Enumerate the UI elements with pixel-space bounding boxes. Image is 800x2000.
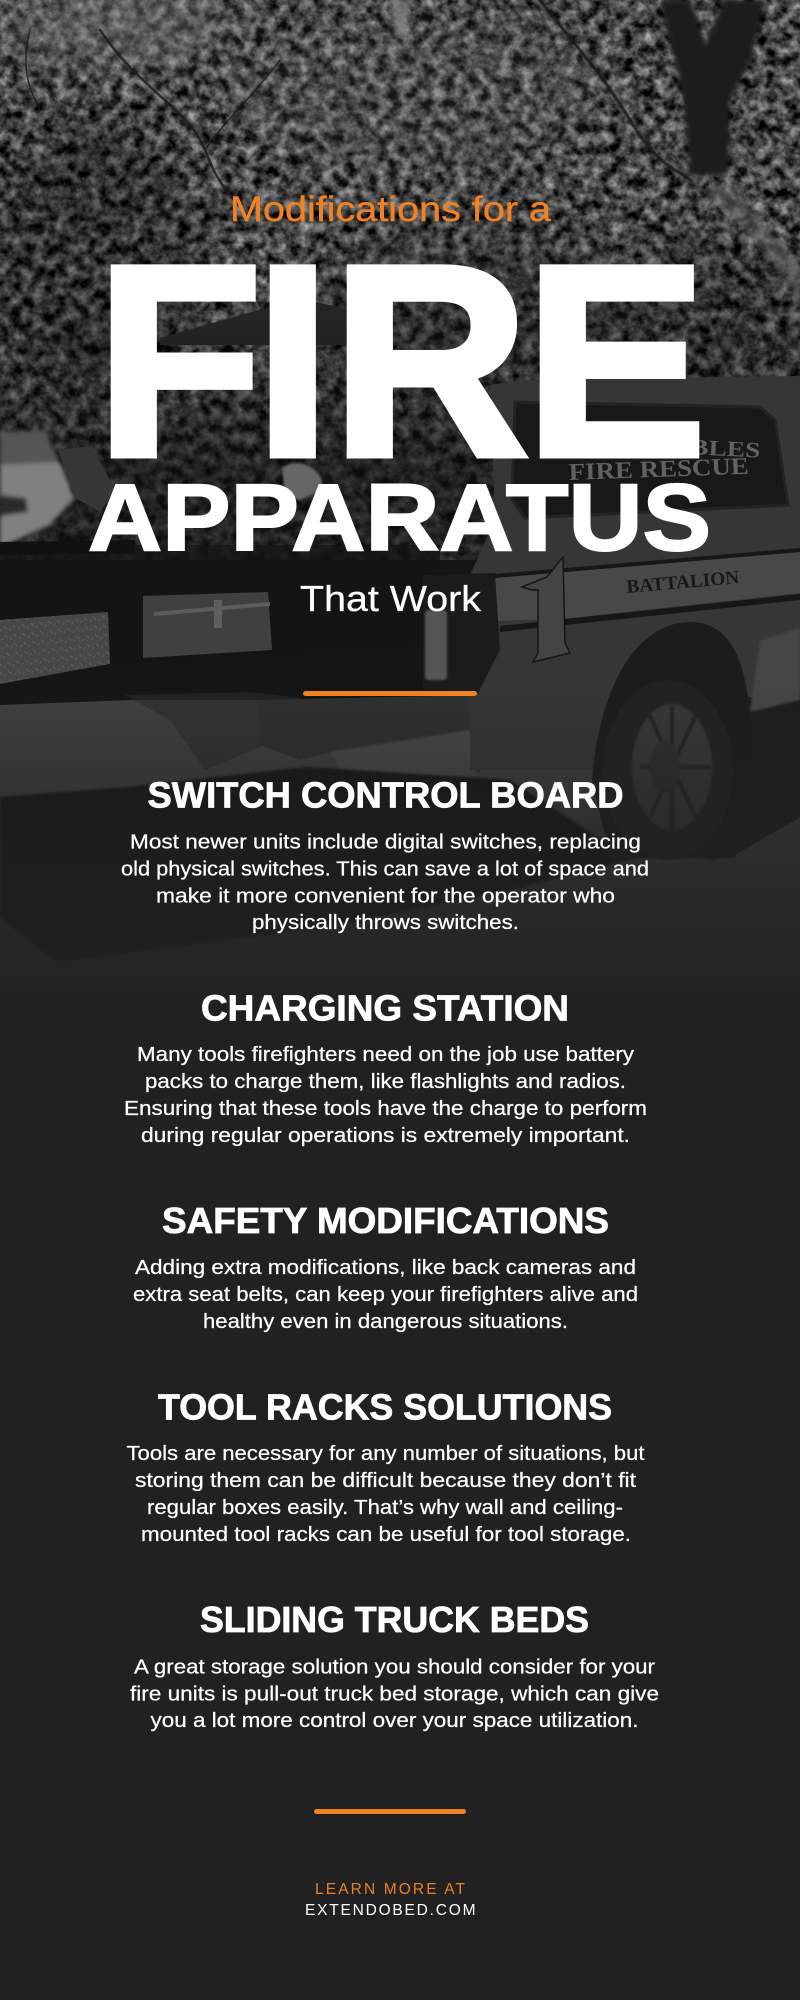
wheel rim — [632, 704, 712, 830]
body text: regular boxes easily. That’s why wall and ceiling- — [147, 1496, 623, 1519]
diamond plate box — [0, 612, 110, 684]
body text — [133, 1256, 638, 1333]
orange divider top — [303, 691, 477, 696]
learn more label: LEARN MORE AT — [315, 1881, 466, 1898]
headline: APPARATUS: APPARATUS — [88, 465, 711, 571]
title group — [88, 190, 711, 619]
rear window — [512, 402, 788, 518]
section: sliding truck beds — [130, 1599, 659, 1732]
section: tool racks solutions — [126, 1386, 645, 1546]
headline: FIRE: FIRE — [96, 209, 706, 513]
body text: storing them can be difficult because they don’t fit — [135, 1469, 636, 1492]
pale branch right — [705, 182, 800, 300]
fade to dark — [0, 690, 800, 1010]
body text: fire units is pull-out truck bed storage, which can give — [130, 1682, 659, 1706]
body text: A great storage solution you should consider for your — [134, 1656, 655, 1678]
body text: mounted tool racks can be useful for tool storage. — [141, 1523, 631, 1546]
cloth pile — [0, 430, 74, 545]
dim lower scene behind truck bed — [0, 290, 800, 690]
truck stripe — [470, 552, 800, 622]
body text: make it more convenient for the operator who — [156, 884, 615, 908]
heading: TOOL RACKS SOLUTIONS — [158, 1386, 612, 1428]
bed rail — [0, 540, 135, 555]
body text: you a lot more control over your space utilization. — [150, 1709, 638, 1732]
large trunk top right — [660, 0, 765, 175]
heading: SAFETY MODIFICATIONS — [162, 1200, 609, 1241]
hitch and bumper — [125, 692, 300, 770]
window lettering: BLES — [690, 434, 761, 463]
heading: CHARGING STATION — [201, 988, 569, 1028]
body text: Ensuring that these tools have the charge to perform — [124, 1097, 647, 1120]
wheel arch — [592, 622, 752, 858]
body text: old physical switches. This can save a lot of space and — [121, 858, 649, 880]
body text — [121, 830, 649, 934]
body text: physically throws switches. — [252, 911, 519, 934]
truck shadow on road — [0, 767, 800, 962]
website: EXTENDOBED.COM — [305, 1902, 476, 1919]
body text: Tools are necessary for any number of situations, but — [126, 1442, 645, 1465]
section: charging station — [124, 988, 647, 1147]
number 1 decal — [522, 557, 570, 662]
body text: packs to charge them, like flashlights and radios. — [145, 1070, 626, 1093]
foliage texture — [0, 0, 800, 560]
section: safety modifications — [133, 1200, 638, 1333]
awning — [160, 298, 352, 345]
body text: Many tools firefighters need on the job use battery — [137, 1043, 635, 1066]
white bag in bed — [282, 463, 322, 500]
subtitle: That Work: That Work — [300, 578, 482, 619]
tool box — [143, 592, 272, 658]
body text: extra seat belts, can keep your firefighters alive and — [133, 1283, 638, 1306]
tree branches — [26, 0, 690, 205]
net bag — [58, 446, 115, 512]
tail light — [423, 573, 500, 693]
battalion lettering: BATTALION — [626, 567, 740, 598]
body text: healthy even in dangerous situations. — [203, 1310, 568, 1333]
body text: Most newer units include digital switches, replacing — [130, 830, 641, 854]
pale trunk top centre — [392, 0, 410, 35]
footer: source — [305, 1881, 476, 1919]
background photo: fire truck under trees — [0, 0, 800, 1010]
section: switch control board — [121, 774, 649, 934]
heading: SWITCH CONTROL BOARD — [148, 774, 624, 816]
eyebrow: Modifications for a: Modifications for a — [230, 190, 552, 229]
heading: SLIDING TRUCK BEDS — [200, 1599, 589, 1640]
window lettering — [568, 434, 761, 486]
underside of truck front — [730, 690, 800, 858]
tire — [603, 680, 733, 860]
body text: Adding extra modifications, like back cameras and — [135, 1256, 636, 1279]
light and dark tree masses — [0, 0, 800, 380]
body text: during regular operations is extremely important. — [141, 1124, 630, 1147]
road — [0, 685, 800, 1005]
body text — [130, 1656, 659, 1732]
lower bed sill — [0, 640, 470, 705]
body text — [124, 1043, 647, 1147]
window lettering: FIRE RESCUE — [568, 454, 749, 486]
body text — [126, 1442, 645, 1546]
front truck highlights — [750, 628, 800, 712]
truck body — [470, 376, 800, 770]
orange divider bottom — [314, 1809, 466, 1814]
